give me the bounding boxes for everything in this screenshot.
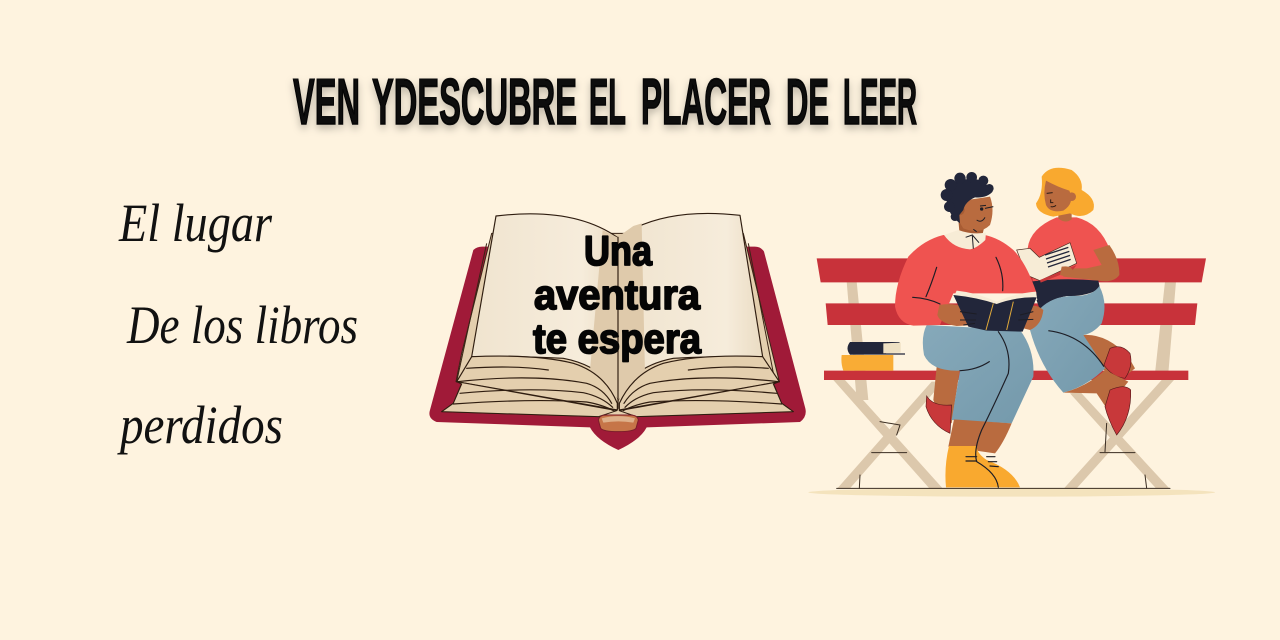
left page — [472, 214, 618, 400]
curved page bases — [457, 356, 617, 410]
script text: place name: perdidos — [117, 395, 283, 455]
page stack — [442, 233, 793, 417]
woman arm — [1063, 245, 1119, 281]
frame details — [837, 422, 1170, 488]
title: VEN — [293, 65, 360, 138]
infographic canvas: LEER — [843, 65, 917, 138]
illustration: two people reading on a bench — [808, 168, 1215, 497]
stacked books — [841, 342, 905, 371]
man back leg and red shoe — [933, 367, 960, 423]
book caption: aventura — [534, 271, 701, 318]
open book illustration — [429, 213, 806, 450]
man book — [953, 291, 1037, 305]
right page — [618, 213, 763, 400]
script text: place name: De los libros — [126, 295, 358, 355]
woman face — [1044, 181, 1071, 211]
spine clasp — [598, 415, 638, 432]
man boot — [945, 446, 1020, 487]
book cover — [429, 247, 806, 450]
title: DE — [786, 65, 829, 138]
bench frame — [833, 282, 1176, 488]
man curly hair — [941, 172, 994, 223]
ground shadow — [808, 488, 1215, 497]
title — [293, 65, 917, 138]
book caption: Una — [584, 227, 653, 274]
book caption: te espera — [533, 315, 702, 362]
woman far leg and red shoe — [1083, 335, 1135, 380]
man collar — [944, 230, 986, 249]
title: PLACER — [641, 65, 771, 138]
man sweater — [895, 235, 1037, 326]
woman legs — [1030, 286, 1105, 393]
woman — [1017, 168, 1135, 435]
man legs — [923, 325, 1033, 423]
man — [895, 172, 1043, 487]
title: EL — [589, 65, 626, 138]
script text: place name: El lugar — [118, 193, 273, 253]
page edge lines — [453, 237, 782, 411]
gutter shading — [590, 223, 645, 400]
woman book — [1017, 243, 1077, 281]
woman shorts — [1030, 279, 1100, 310]
woman near shoe — [1105, 387, 1131, 435]
man shin — [948, 419, 1012, 453]
woman torso — [1028, 217, 1110, 283]
woman neck — [1058, 207, 1072, 221]
script text: place name — [117, 193, 358, 455]
book caption — [533, 227, 702, 362]
bench slats — [817, 258, 1206, 380]
man neck — [958, 220, 985, 238]
man hands — [937, 304, 977, 326]
man face — [956, 197, 992, 231]
title: YDESCUBRE — [372, 65, 577, 138]
woman hair — [1036, 168, 1094, 217]
